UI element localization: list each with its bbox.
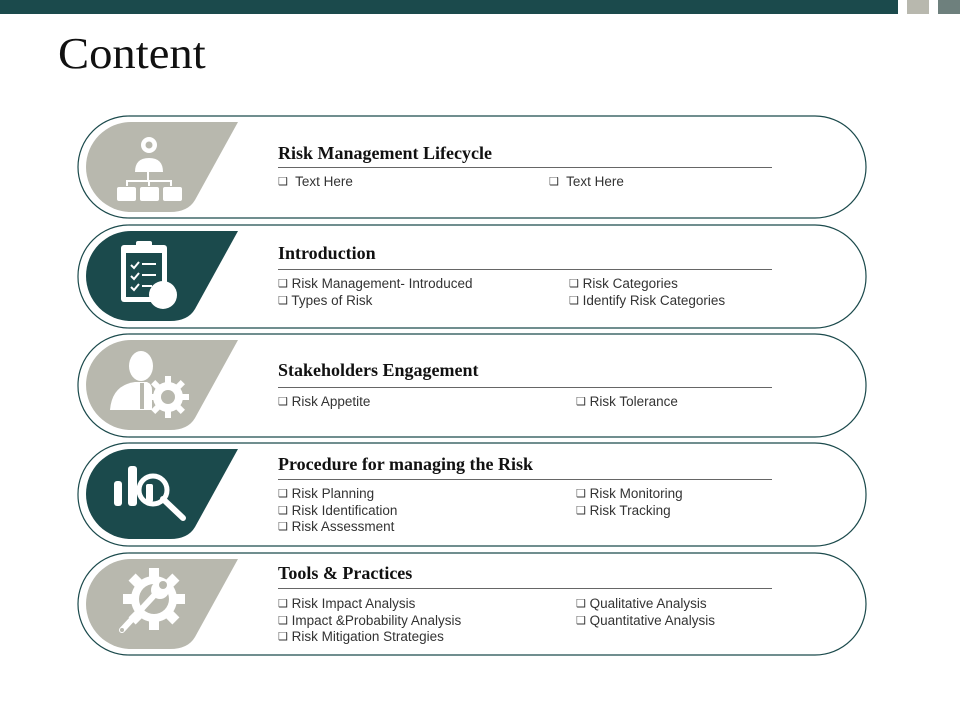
row 2 text: ❑ Risk Management- Introduced: [278, 276, 472, 291]
row 4 text: ❑ Risk Monitoring: [576, 486, 683, 501]
row 4 text: [278, 454, 772, 534]
row 5: [78, 553, 866, 655]
row 3: [78, 334, 866, 437]
row 1 outline + leaf: [78, 116, 866, 218]
row 4 text: ❑ Risk Planning: [278, 486, 374, 501]
row 4 text: ❑ Risk Identification: [278, 502, 397, 518]
row 2 text: [278, 243, 772, 308]
row 1 text: ❑ Text Here: [549, 174, 624, 189]
row 5 text: [278, 563, 772, 644]
title: Content: [58, 29, 206, 78]
row 4: [78, 443, 866, 546]
row 3 text: ❑ Risk Appetite: [278, 394, 370, 409]
row 1 text: [278, 143, 772, 189]
row 2 text: ❑ Identify Risk Categories: [569, 292, 725, 308]
decorative squares: [907, 0, 960, 14]
row 2 text: Introduction: [278, 243, 376, 263]
row 1 text: Risk Management Lifecycle: [278, 143, 492, 163]
row 5 text: ❑ Impact &Probability Analysis: [278, 612, 461, 628]
row 3 text: [278, 360, 772, 409]
row 3 text: Stakeholders Engagement: [278, 360, 479, 380]
icon: person with gear: [110, 351, 189, 418]
icon: chart magnifier: [114, 466, 183, 518]
row 2 text: ❑ Risk Categories: [569, 276, 678, 291]
icon: clipboard: [121, 241, 177, 309]
row 5 text: ❑ Qualitative Analysis: [576, 596, 707, 611]
row 5 text: ❑ Risk Mitigation Strategies: [278, 629, 444, 644]
row 2: [78, 225, 866, 328]
icon: gear wrench: [120, 568, 185, 632]
row 4 text: Procedure for managing the Risk: [278, 454, 533, 474]
row 5 text: ❑ Quantitative Analysis: [576, 612, 715, 628]
row 5 text: ❑ Risk Impact Analysis: [278, 596, 415, 611]
row 1 text: ❑ Text Here: [278, 174, 353, 189]
row 4 text: ❑ Risk Tracking: [576, 502, 671, 518]
row 4 text: ❑ Risk Assessment: [278, 519, 394, 534]
row 3 text: ❑ Risk Tolerance: [576, 394, 678, 409]
row 5 text: Tools & Practices: [278, 563, 412, 583]
icon: person gear hierarchy: [117, 137, 182, 201]
row 2 text: ❑ Types of Risk: [278, 292, 372, 308]
top bar: [0, 0, 898, 14]
